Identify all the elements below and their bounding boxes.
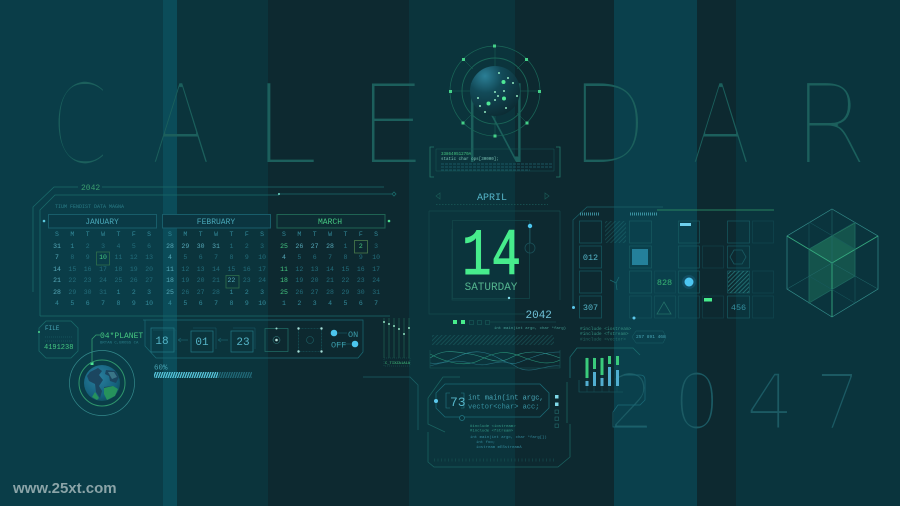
calendar: January: 3 [147, 288, 151, 296]
calendar: February [166, 231, 266, 307]
calendar: January: 15 [68, 266, 76, 272]
calendar: January: 6 [147, 242, 151, 250]
calendar: February: 6 [199, 300, 203, 307]
year: 2047 thin numerals: 0 [673, 358, 721, 446]
calendar: January: T [86, 231, 90, 238]
date highlights [96, 240, 368, 288]
code listing: #include <iostream> [470, 424, 516, 429]
number tag [632, 331, 666, 343]
radar globe [449, 44, 541, 138]
file box: FILE [45, 325, 60, 332]
pager squares [453, 320, 556, 324]
toggle: on / off: OFF [331, 340, 346, 350]
calendar: March: 28 [326, 242, 334, 250]
calendar: February: 17 [258, 266, 266, 272]
title: CALENDAR thin lettering: D [570, 61, 648, 190]
planet label: 04*PLANET [100, 332, 143, 341]
calendar: January: 11 [114, 254, 122, 261]
calendar: March: 1 [343, 242, 347, 250]
calendar: January: 28 [53, 288, 61, 296]
year: 2047 thin numerals: 2 [609, 358, 655, 446]
calendar: February: 31 [212, 242, 220, 250]
title: CALENDAR thin lettering: E [357, 61, 427, 190]
calendar: January: 21 [53, 277, 61, 284]
calendar: February: 22 [228, 277, 235, 284]
counter: 01: 01 [195, 337, 209, 349]
calendar: January: 26 [130, 277, 138, 284]
title: CALENDAR thin lettering: C [50, 61, 109, 190]
calendar: February: 28 [166, 242, 174, 250]
calendar: January: 13 [145, 254, 153, 261]
watermark: www.25xt.com [12, 480, 117, 497]
calendar: January: M [70, 231, 74, 238]
calendar: February: 9 [245, 300, 249, 307]
calendar: March: 27 [311, 288, 319, 296]
code listing: iostream mESstreamA [476, 445, 522, 450]
calendar: January: 8 [116, 300, 120, 307]
year: 2047 thin numerals [609, 358, 861, 446]
calendar: February: T [199, 231, 203, 238]
grid cell content: 828 [657, 278, 672, 288]
file box [38, 321, 78, 358]
date panel frames [429, 211, 560, 314]
calendar: January: 10 [99, 254, 107, 261]
calendar: February: 28 [212, 288, 220, 296]
counter: 23: 23 [236, 337, 250, 349]
counter: 18: 18 [155, 336, 169, 348]
bar chart panel [570, 348, 647, 427]
calendar: March: 20 [311, 277, 319, 284]
arrow: 18 to 01 [178, 338, 188, 342]
calendar: January: 22 [68, 277, 76, 284]
calendar: February: T [229, 231, 233, 238]
code listing: #include <fstream> [470, 428, 514, 434]
year: 2042: 2042 [526, 310, 552, 322]
include text: #include <vector> [580, 336, 626, 342]
file box: 4191238 [44, 344, 73, 352]
counter: 23 [231, 328, 255, 352]
calendar: March: 9 [359, 254, 363, 261]
calendar: January: 17 [99, 266, 107, 272]
calendar: March: 7 [328, 254, 332, 261]
sliders: C_TIXZA1A1A [385, 362, 411, 366]
calendar: January: 30 [84, 288, 92, 296]
arrow: 01 to 23 [218, 338, 228, 342]
calendar: March: 10 [372, 254, 380, 261]
calendar: March: 4 [328, 300, 332, 307]
toggle: on / off: ON [348, 330, 358, 340]
calendar: March: 25 [280, 288, 288, 296]
calendar: March: 11 [280, 266, 288, 272]
title: CALENDAR thin lettering: A [690, 61, 752, 190]
calendar: January: 1 [70, 242, 74, 250]
calendar: February: 10 [258, 300, 266, 307]
calendar: February: 2 [245, 288, 249, 296]
code panel octagon: 73 [450, 395, 466, 410]
grid panel cells [580, 221, 774, 318]
calendar bullets [43, 220, 390, 222]
control panel frame [143, 320, 363, 358]
progress bar: 60% [154, 364, 252, 378]
calendar: January: 5 [70, 300, 74, 307]
calendar: February: 25 [166, 288, 174, 296]
toggle: on / off [331, 330, 358, 350]
calendar: February: F [245, 231, 249, 238]
month heading: April: APRIL [477, 193, 507, 204]
calendar: January [53, 231, 153, 307]
calendar: March: 29 [342, 288, 349, 296]
calendar: January: T [116, 231, 120, 238]
hatched footer [434, 458, 556, 462]
month header: January: JANUARY [85, 218, 119, 227]
date marker [508, 224, 535, 299]
month heading: April [436, 193, 549, 204]
calendar: March: 2 [297, 300, 301, 307]
calendar: February: 3 [260, 242, 264, 250]
status squares [555, 395, 558, 428]
calendar: January: 19 [130, 266, 138, 272]
calendar: March: 4 [282, 254, 286, 261]
calendar: January: 14 [53, 266, 61, 272]
calendar: February: 7 [214, 254, 218, 261]
calendar: January: 3 [101, 242, 105, 250]
calendar: February: 12 [181, 266, 189, 272]
calendar: March: 26 [295, 288, 303, 296]
calendar: January: 5 [132, 242, 136, 250]
calendar: March: 7 [374, 300, 378, 307]
calendar: March: 25 [280, 242, 288, 250]
calendar: February: 21 [212, 277, 220, 284]
calendar: February: 1 [229, 288, 233, 296]
code snippet box [430, 147, 560, 177]
calendar: January: 31 [99, 288, 107, 296]
calendar: March: 27 [311, 242, 319, 250]
calendar: March [280, 231, 380, 307]
calendar: January: 16 [84, 266, 92, 272]
calendar: March: T [313, 231, 317, 238]
calendar: March: 13 [311, 266, 319, 272]
calendar: March: 15 [342, 266, 349, 272]
month header: February [162, 214, 270, 228]
calendar: March: 16 [357, 266, 365, 272]
calendar: February: 7 [214, 300, 218, 307]
calendar: March: S [282, 231, 286, 238]
calendar: March: T [343, 231, 347, 238]
code panel octagon: int main(int argc, [468, 394, 544, 402]
calendar: January: 24 [99, 277, 107, 284]
calendar: February: 5 [183, 300, 187, 307]
calendar: March: S [374, 231, 378, 238]
calendar: February: 5 [183, 254, 187, 261]
month header: January [48, 214, 156, 228]
calendar: February: 8 [229, 254, 233, 261]
title: CALENDAR thin lettering [50, 61, 869, 190]
calendar: February: 20 [197, 277, 205, 284]
calendar: January: 10 [145, 300, 153, 307]
calendar: March: 24 [372, 277, 380, 284]
calendar: February: 4 [168, 300, 172, 307]
code listing: int foo; [476, 440, 495, 445]
calendar: January: 2 [132, 288, 136, 296]
grid cell content: 456 [731, 303, 746, 313]
calendar: March: 19 [295, 277, 303, 284]
calendar: January: 4 [116, 242, 120, 250]
calendar: February: 6 [199, 254, 203, 261]
calendar: March: 31 [372, 288, 380, 296]
title: CALENDAR thin lettering: A [150, 61, 212, 190]
calendar: March: W [328, 231, 332, 238]
calendar: March: 14 [326, 266, 334, 272]
counter: 01 [191, 328, 216, 352]
calendar: March: 12 [295, 266, 303, 272]
code snippet box: static char ops[30000]; [441, 157, 499, 162]
calendar: March: 8 [343, 254, 347, 261]
include text: #include <iostream> [580, 326, 632, 332]
calendar: March: 5 [343, 300, 347, 307]
calendar: January: 4 [55, 300, 59, 307]
calendar: January: 20 [145, 266, 153, 272]
code panel octagon [434, 384, 549, 420]
sliders [383, 318, 411, 366]
calendar: March: F [359, 231, 363, 238]
calendar: March: 23 [357, 277, 365, 284]
calendar: January: 6 [86, 300, 90, 307]
planet label [90, 332, 143, 365]
calendar: February: 24 [258, 277, 266, 284]
icon: corner-dot square [297, 327, 323, 353]
caption: calendar header: TIUM FENDIST DATA MAGNA [55, 204, 124, 210]
code listing: int main(int argc, char *farg[]) [470, 435, 547, 440]
calendar: February: 30 [197, 242, 205, 250]
calendar: February: S [168, 231, 172, 238]
calendar: January: 8 [70, 254, 74, 261]
include text: #include <fstream> [580, 331, 629, 337]
calendar: January: 7 [101, 300, 105, 307]
calendar: January: 27 [145, 277, 153, 284]
title: CALENDAR thin lettering: L [251, 61, 319, 190]
calendar: March: 18 [280, 277, 288, 284]
caption: code line: int main(int argc, char *farg) [494, 326, 566, 331]
icon: earth globe with rings [70, 350, 134, 416]
isometric cube [787, 209, 878, 317]
calendar: February: S [260, 231, 264, 238]
title: CALENDAR thin lettering: N [456, 61, 539, 190]
calendar: March: 22 [342, 277, 349, 284]
calendar: January: S [55, 231, 59, 238]
calendar: February: 10 [258, 254, 266, 261]
calendar: March: 1 [282, 300, 286, 307]
calendar: January: 7 [55, 254, 59, 261]
progress bar: 60%: 60% [154, 364, 168, 372]
calendar: January: 25 [114, 277, 122, 284]
month header: March [277, 214, 385, 228]
weekday: Saturday: SATURDAY [465, 282, 518, 294]
grid cell content [572, 221, 749, 320]
counter: 18 [151, 328, 176, 352]
calendar: February: 11 [166, 266, 174, 272]
calendar: January: 23 [84, 277, 92, 284]
calendar: January: 2 [86, 242, 90, 250]
calendar: March: 17 [372, 266, 380, 272]
calendar: March: 5 [297, 254, 301, 261]
calendar: February: 2 [245, 242, 249, 250]
calendar: February: 14 [212, 266, 220, 272]
big date: 14: 14 [462, 219, 521, 294]
calendar: February: 16 [243, 266, 251, 272]
corner connector line [363, 377, 418, 430]
calendar: March: 30 [357, 288, 365, 296]
calendar: February: 26 [181, 288, 189, 296]
calendar frame [33, 184, 396, 316]
calendar: January: 31 [53, 242, 61, 250]
waveform [430, 350, 560, 370]
planet label: BRTAN C,BROSS CA [100, 342, 139, 346]
calendar: January: 18 [114, 266, 122, 272]
calendar: February: 13 [197, 266, 205, 272]
calendar: January: S [147, 231, 151, 238]
calendar: March: M [297, 231, 301, 238]
calendar: March: 6 [359, 300, 363, 307]
code snippet box: 33864951270A [441, 153, 472, 157]
code panel outer frame [428, 377, 570, 467]
calendar: February: 1 [229, 242, 233, 250]
calendar: January: 9 [132, 300, 136, 307]
calendar: January: F [132, 231, 136, 238]
number tag: 257 891 468 [636, 334, 666, 340]
label: calendar year: 2042 [81, 184, 100, 193]
calendar: February: 3 [260, 288, 264, 296]
calendar: March: 21 [326, 277, 334, 284]
grid cell content: 307 [583, 303, 598, 313]
hatched band [432, 335, 554, 345]
calendar: February: 19 [181, 277, 189, 284]
calendar: February: 18 [166, 277, 174, 284]
calendar: February: 29 [181, 242, 189, 250]
calendar: February: 27 [197, 288, 205, 296]
calendar: February: 8 [229, 300, 233, 307]
calendar: March: 26 [295, 242, 303, 250]
include text [580, 326, 632, 342]
calendar: February: 23 [243, 277, 251, 284]
calendar: March: 2 [359, 242, 363, 250]
calendar: February: 15 [228, 266, 235, 272]
grid cell content: 012 [583, 253, 598, 263]
icon: target square [265, 328, 288, 352]
year: 2047 thin numerals: 4 [746, 358, 794, 446]
calendar: January: W [101, 231, 105, 238]
calendar: March: 28 [326, 288, 334, 296]
year: 2047 thin numerals: 7 [815, 358, 861, 446]
calendar: January: 1 [116, 288, 120, 296]
code panel octagon: vector<char> acc; [468, 404, 539, 412]
calendar: February: 9 [245, 254, 249, 261]
calendar: January: 9 [86, 254, 90, 261]
calendar: February: W [214, 231, 218, 238]
month header: March: MARCH [318, 218, 342, 227]
month header: February: FEBRUARY [197, 218, 235, 227]
calendar: February: 4 [168, 254, 172, 261]
calendar: March: 3 [313, 300, 317, 307]
code listing [470, 424, 547, 450]
calendar: March: 3 [374, 242, 378, 250]
calendar: January: 12 [130, 254, 138, 261]
calendar: January: 29 [68, 288, 76, 296]
calendar: March: 6 [313, 254, 317, 261]
title: CALENDAR thin lettering: R [792, 61, 869, 190]
grid panel frame and header [573, 207, 774, 307]
calendar: February: M [183, 231, 187, 238]
